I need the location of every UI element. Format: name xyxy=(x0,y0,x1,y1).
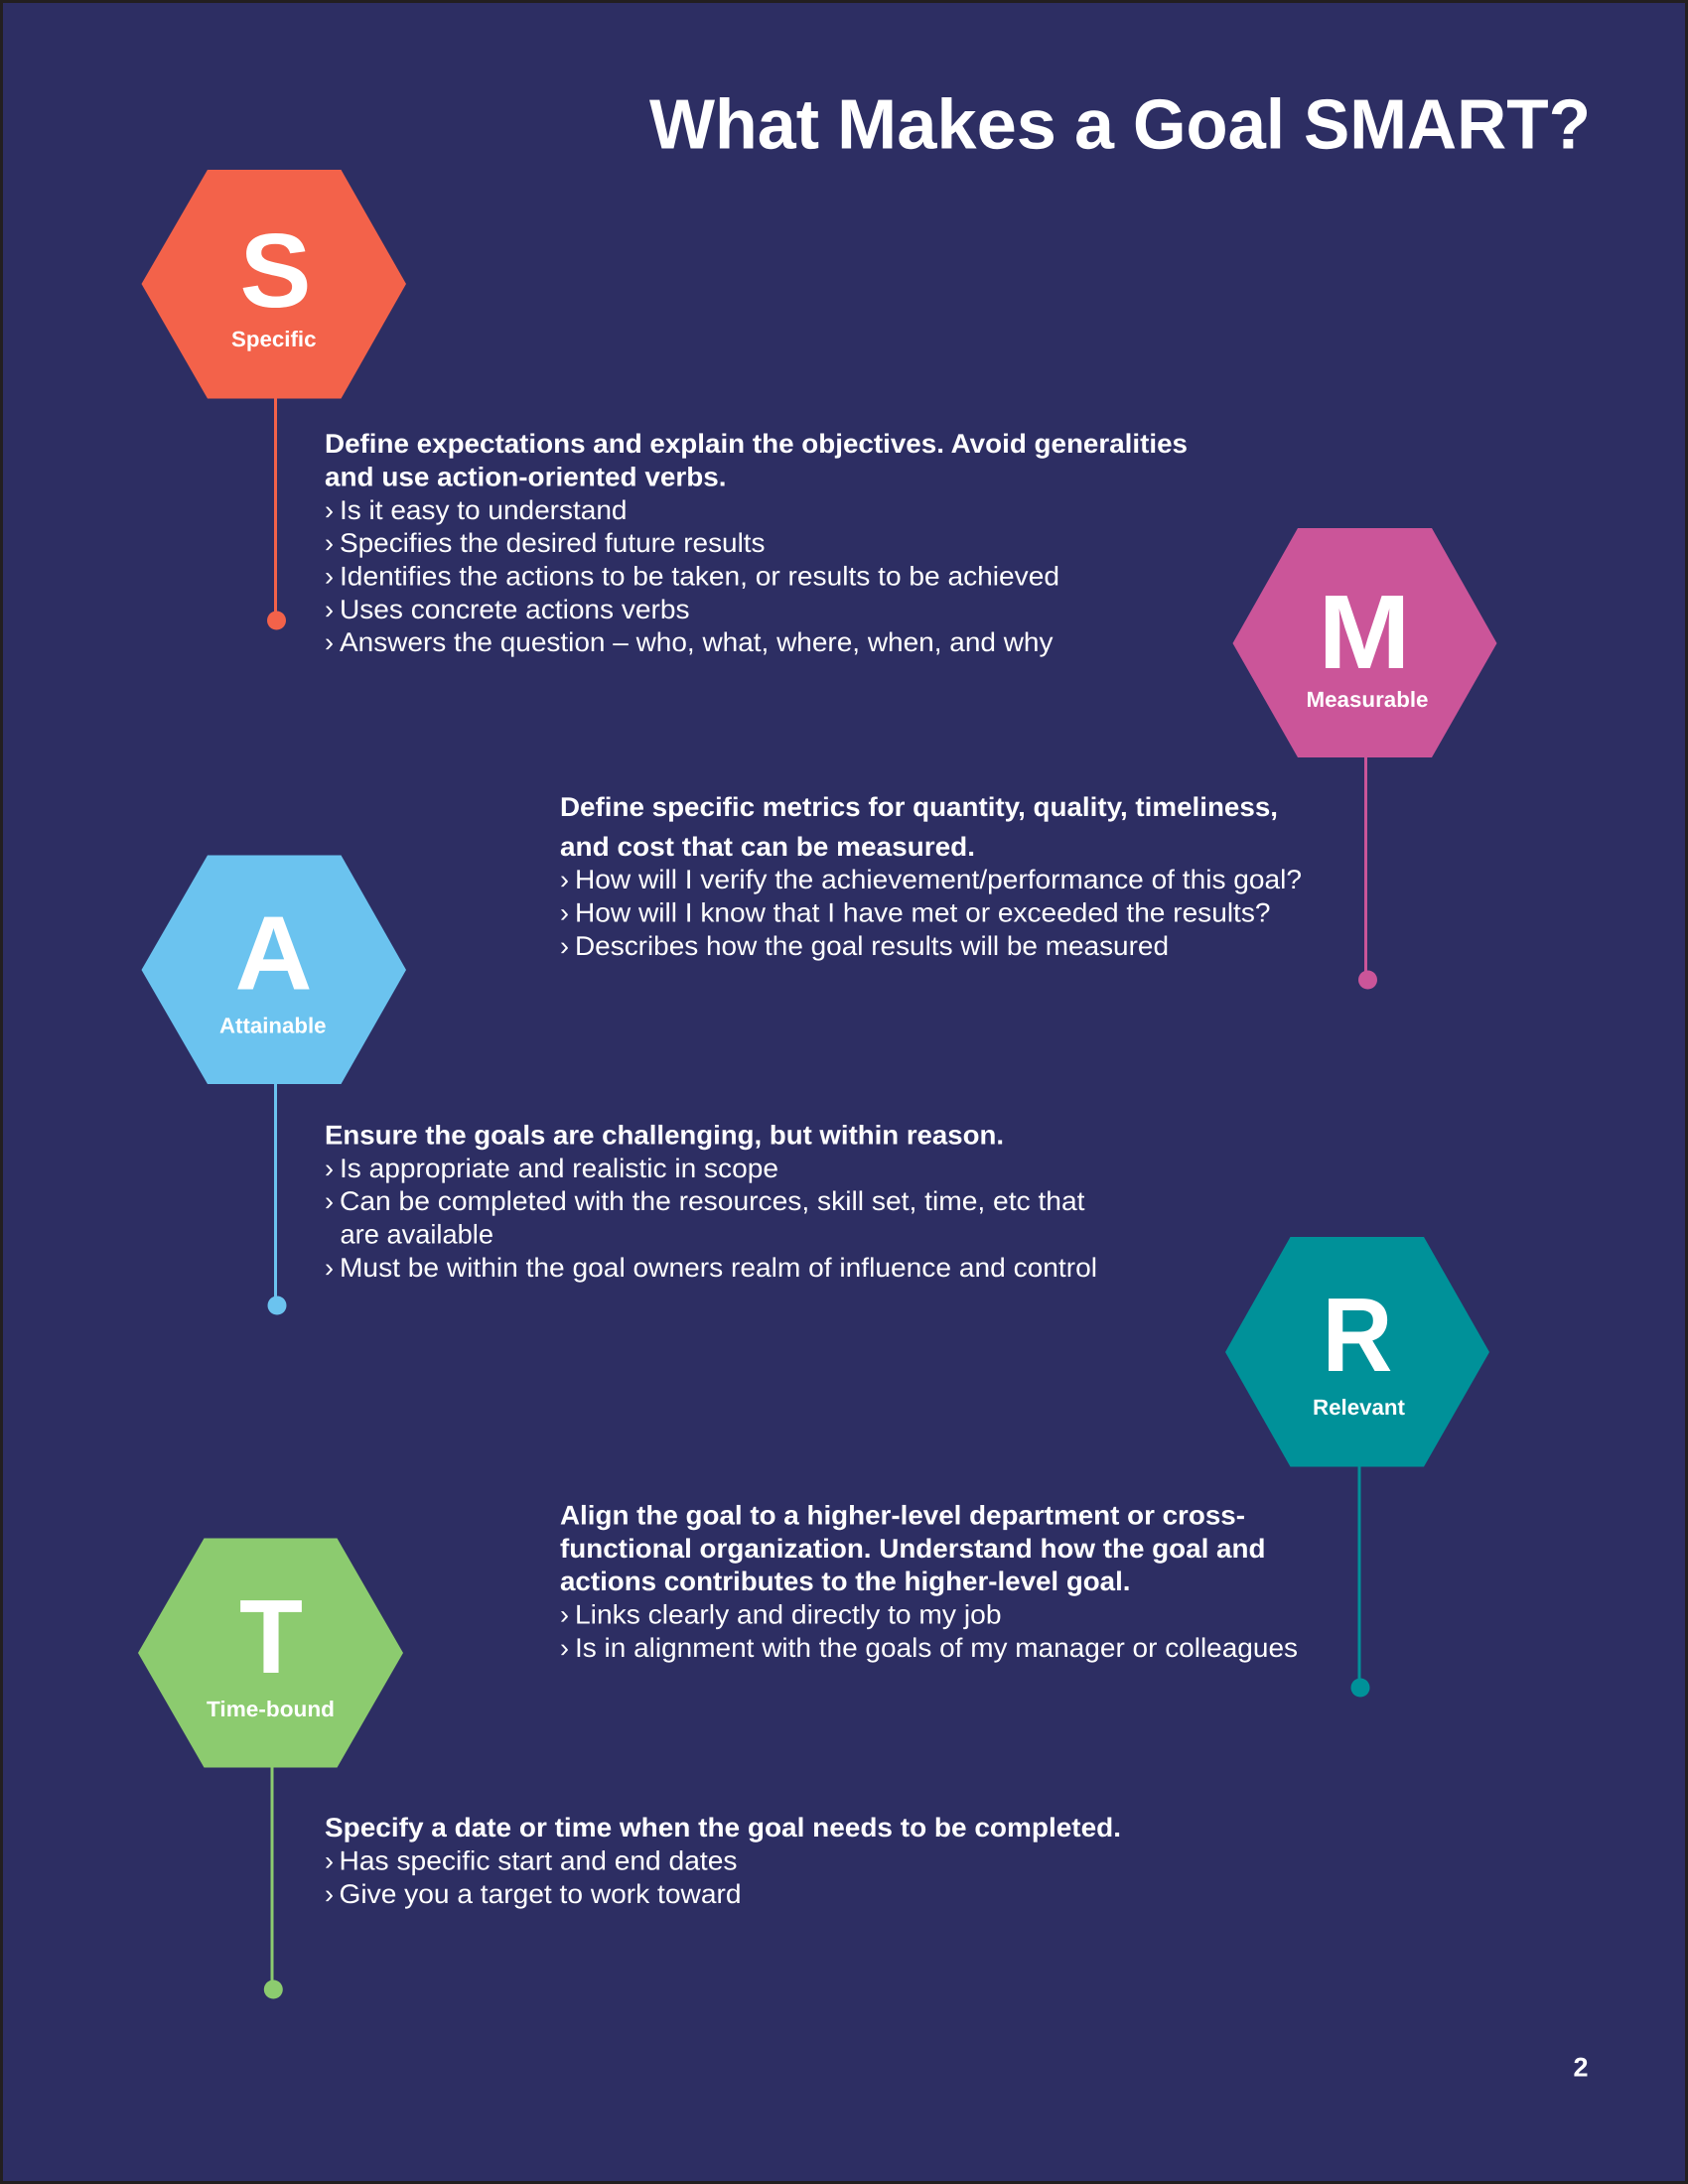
text block: measurable: Describes how the goal results will be measured xyxy=(575,931,1169,961)
text block: time-bound: Give you a target to work toward xyxy=(340,1879,741,1909)
icon: time-bound connector line and dot xyxy=(264,1767,283,1999)
icon: T hexagon: T xyxy=(239,1578,303,1696)
icon: attainable connector line and dot xyxy=(268,1084,286,1314)
text block: time-bound: Specify a date or time when the goal needs to be completed. xyxy=(325,1813,1121,1843)
text block: attainable xyxy=(325,1120,1097,1283)
text block: measurable xyxy=(560,792,1302,961)
icon: T hexagon: Time-bound xyxy=(207,1697,335,1721)
panel: time-bound xyxy=(138,1539,1121,1999)
title: SMART? xyxy=(1304,85,1591,165)
icon: A hexagon: Attainable xyxy=(219,1013,326,1038)
text block: measurable: › xyxy=(560,897,569,927)
text block: specific: Uses concrete actions verbs xyxy=(340,595,689,624)
text block: relevant: Align the goal to a higher-level department or cross- xyxy=(560,1501,1245,1531)
icon: measurable connector line and dot xyxy=(1358,757,1377,989)
text block: specific: › xyxy=(325,528,334,558)
text block: measurable: Define specific metrics for quantity, quality, timeliness, xyxy=(560,792,1278,822)
text block: specific: and use action-oriented verbs. xyxy=(325,463,727,492)
text block: relevant: › xyxy=(560,1600,569,1630)
text block: attainable: are available xyxy=(340,1219,493,1249)
text block: specific: Identifies the actions to be taken, or results to be achieved xyxy=(340,562,1059,592)
text block: measurable: › xyxy=(560,931,569,961)
icon: M hexagon: M xyxy=(1319,574,1410,691)
text block: specific: Define expectations and explain the objectives. Avoid generalities xyxy=(325,429,1188,459)
text block: specific: Specifies the desired future results xyxy=(340,528,765,558)
text block: relevant: functional organization. Understand how the goal and xyxy=(560,1534,1265,1564)
text block: specific: › xyxy=(325,627,334,657)
text block: measurable: How will I know that I have met or exceeded the results? xyxy=(575,897,1271,927)
text block: time-bound: Has specific start and end dates xyxy=(340,1846,737,1876)
icon: S hexagon: Specific xyxy=(231,327,316,351)
text block: relevant: Links clearly and directly to my job xyxy=(575,1600,1001,1630)
icon: S hexagon xyxy=(141,170,406,399)
text block: attainable: Ensure the goals are challenging, but within reason. xyxy=(325,1120,1004,1150)
text block: attainable: Can be completed with the resources, skill set, time, etc that xyxy=(340,1186,1085,1216)
text block: relevant: Is in alignment with the goals of my manager or colleagues xyxy=(575,1633,1298,1663)
page number: 2 xyxy=(1573,2053,1589,2083)
panel: measurable xyxy=(560,528,1497,989)
panel: attainable xyxy=(141,856,1097,1314)
icon: A hexagon xyxy=(141,856,406,1084)
icon: relevant connector line and dot xyxy=(1350,1466,1370,1698)
text block: attainable: › xyxy=(325,1253,334,1283)
icon: A hexagon: A xyxy=(234,895,312,1013)
icon: T hexagon xyxy=(138,1539,403,1767)
title: What xyxy=(649,85,819,165)
text block: specific: Is it easy to understand xyxy=(340,495,628,525)
text block: specific: Answers the question – who, what, where, when, and why xyxy=(340,627,1054,657)
text block: specific: › xyxy=(325,595,334,624)
text block: relevant: actions contributes to the higher-level goal. xyxy=(560,1567,1130,1596)
icon: S hexagon: S xyxy=(240,212,312,330)
title xyxy=(649,85,1591,165)
icon: M hexagon: Measurable xyxy=(1307,687,1428,712)
icon: R hexagon xyxy=(1225,1237,1489,1467)
title: Goal xyxy=(1133,85,1285,165)
text block: time-bound: › xyxy=(325,1846,334,1876)
panel: specific xyxy=(141,170,1188,657)
icon: R hexagon: R xyxy=(1323,1277,1392,1394)
text block: attainable: Must be within the goal owners realm of influence and control xyxy=(340,1253,1097,1283)
text block: specific: › xyxy=(325,495,334,525)
text block: measurable: and cost that can be measured. xyxy=(560,832,975,862)
icon: specific connector line and dot xyxy=(267,398,286,629)
panel: relevant xyxy=(560,1237,1489,1698)
text block: time-bound: › xyxy=(325,1879,334,1909)
text block: specific: › xyxy=(325,562,334,592)
text block: attainable: › xyxy=(325,1186,334,1216)
text block: specific xyxy=(325,429,1188,657)
icon: R hexagon: Relevant xyxy=(1313,1395,1406,1420)
text block: time-bound xyxy=(325,1813,1121,1909)
text block: attainable: › xyxy=(325,1154,334,1183)
title: a xyxy=(1074,85,1115,165)
text block: measurable: › xyxy=(560,865,569,894)
text block: relevant: › xyxy=(560,1633,569,1663)
text block: measurable: How will I verify the achievement/performance of this goal? xyxy=(575,865,1302,894)
title: Makes xyxy=(837,85,1056,165)
text block: relevant xyxy=(560,1501,1298,1663)
icon: M hexagon xyxy=(1233,528,1497,757)
text block: attainable: Is appropriate and realistic in scope xyxy=(340,1154,778,1183)
